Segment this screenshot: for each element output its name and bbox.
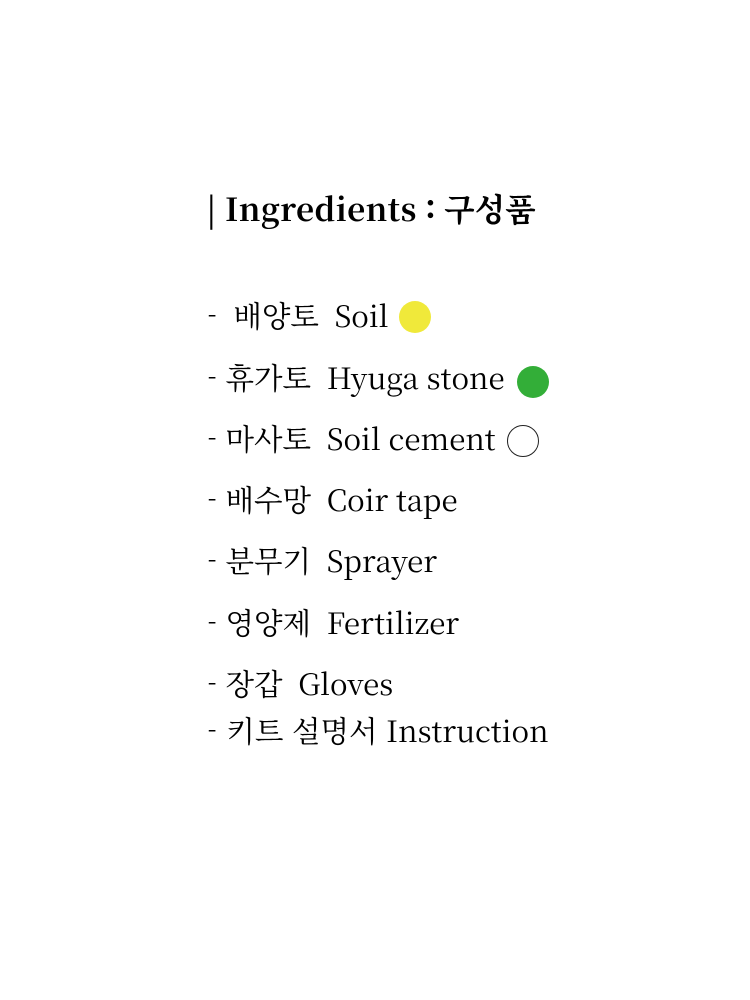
list item: instruction: - 키트 설명서 Instruction <box>206 709 549 751</box>
list item: soil: - 배양토 Soil <box>206 294 389 336</box>
list item: sprayer: - 분무기 Sprayer <box>206 539 437 581</box>
icon: green dot <box>517 366 549 398</box>
list item: coir tape: - 배수망 Coir tape <box>206 478 458 520</box>
list item: soil cement: - 마사토 Soil cement <box>206 417 496 459</box>
list item: hyuga stone: - 휴가토 Hyuga stone <box>206 356 505 398</box>
list item: gloves: - 장갑 Gloves <box>206 662 393 704</box>
icon: white dot <box>507 425 539 457</box>
list item: fertilizer: - 영양제 Fertilizer <box>206 601 459 643</box>
icon: yellow dot <box>399 301 431 333</box>
title: | Ingredients : 구성품 <box>206 186 536 231</box>
